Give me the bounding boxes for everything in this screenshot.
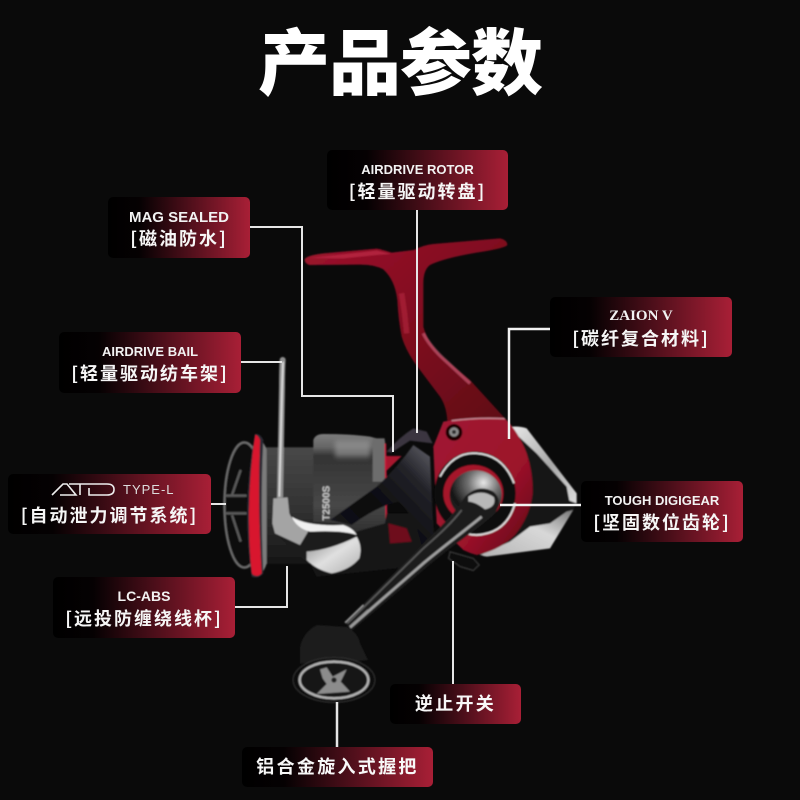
icon: atd logo (52, 483, 115, 496)
label: airdrive rotor (327, 150, 508, 210)
spool line body (260, 447, 317, 564)
label: airdrive rotor: AIRDRIVE ROTOR (361, 162, 474, 177)
label: tough digigear (581, 481, 743, 542)
label: lc-abs: LC-ABS (118, 588, 170, 604)
reel (224, 238, 577, 702)
label: zaion v: [碳纤复合材料] (572, 325, 710, 351)
frame: silver rear body (477, 427, 577, 557)
leader line: handle knob (336, 702, 338, 747)
label: atd type-l: [自动泄力调节系统] (21, 502, 198, 528)
leader line: anti-reverse switch (452, 561, 454, 684)
label: zaion v: ZAION V (609, 308, 673, 324)
hub rings (434, 452, 516, 535)
label: anti-reverse switch (390, 684, 521, 724)
label: mag sealed (108, 197, 250, 258)
rotor arm: red upper arm (305, 238, 507, 427)
title: 产品参数 (258, 5, 542, 110)
red seam (385, 456, 402, 471)
leader line: lc-abs (235, 566, 287, 607)
label: handle knob: 铝合金旋入式握把 (256, 753, 419, 779)
skirt highlight (335, 441, 370, 457)
leader line: mag sealed (250, 227, 393, 452)
label: lc-abs: [远投防缠绕线杯] (65, 605, 223, 631)
leader line: airdrive rotor (416, 210, 418, 433)
body edge highlight (452, 418, 505, 421)
pivot screw (446, 424, 462, 441)
handle knob (293, 625, 375, 702)
rotor cup: black wing (310, 428, 435, 577)
bail arm: silver (272, 497, 362, 573)
leader line: airdrive bail (241, 361, 282, 363)
label: airdrive bail (59, 332, 241, 393)
handle arm (345, 488, 499, 631)
leader line: tough digigear (500, 504, 581, 506)
label: airdrive bail: AIRDRIVE BAIL (102, 344, 198, 359)
arm highlights (310, 251, 470, 383)
label: mag sealed: [磁油防水] (130, 225, 228, 251)
body: red gear housing (433, 418, 533, 555)
label: lc-abs (53, 577, 235, 638)
model text: T2500S (321, 485, 332, 521)
handle shaft tip (345, 605, 368, 627)
spool flange (247, 434, 267, 577)
label: mag sealed: MAG SEALED (129, 209, 229, 226)
label: zaion v (550, 297, 732, 357)
spool front cage (224, 442, 264, 568)
leader line: zaion v (509, 329, 550, 439)
label: anti-reverse switch: 逆止开关 (415, 690, 496, 716)
label: atd type-l (8, 474, 211, 534)
label: tough digigear: [坚固数位齿轮] (593, 509, 731, 535)
label: airdrive bail: [轻量驱动纺车架] (71, 360, 229, 386)
leader line: atd (211, 503, 226, 505)
label: tough digigear: TOUGH DIGIGEAR (605, 493, 719, 508)
anti-reverse switch (448, 552, 479, 571)
atd type text: TYPE-L (123, 482, 175, 497)
label: airdrive rotor: [轻量驱动转盘] (349, 178, 486, 204)
bail wire (280, 360, 283, 498)
label: handle knob (242, 747, 433, 787)
spool skirt (313, 434, 387, 563)
